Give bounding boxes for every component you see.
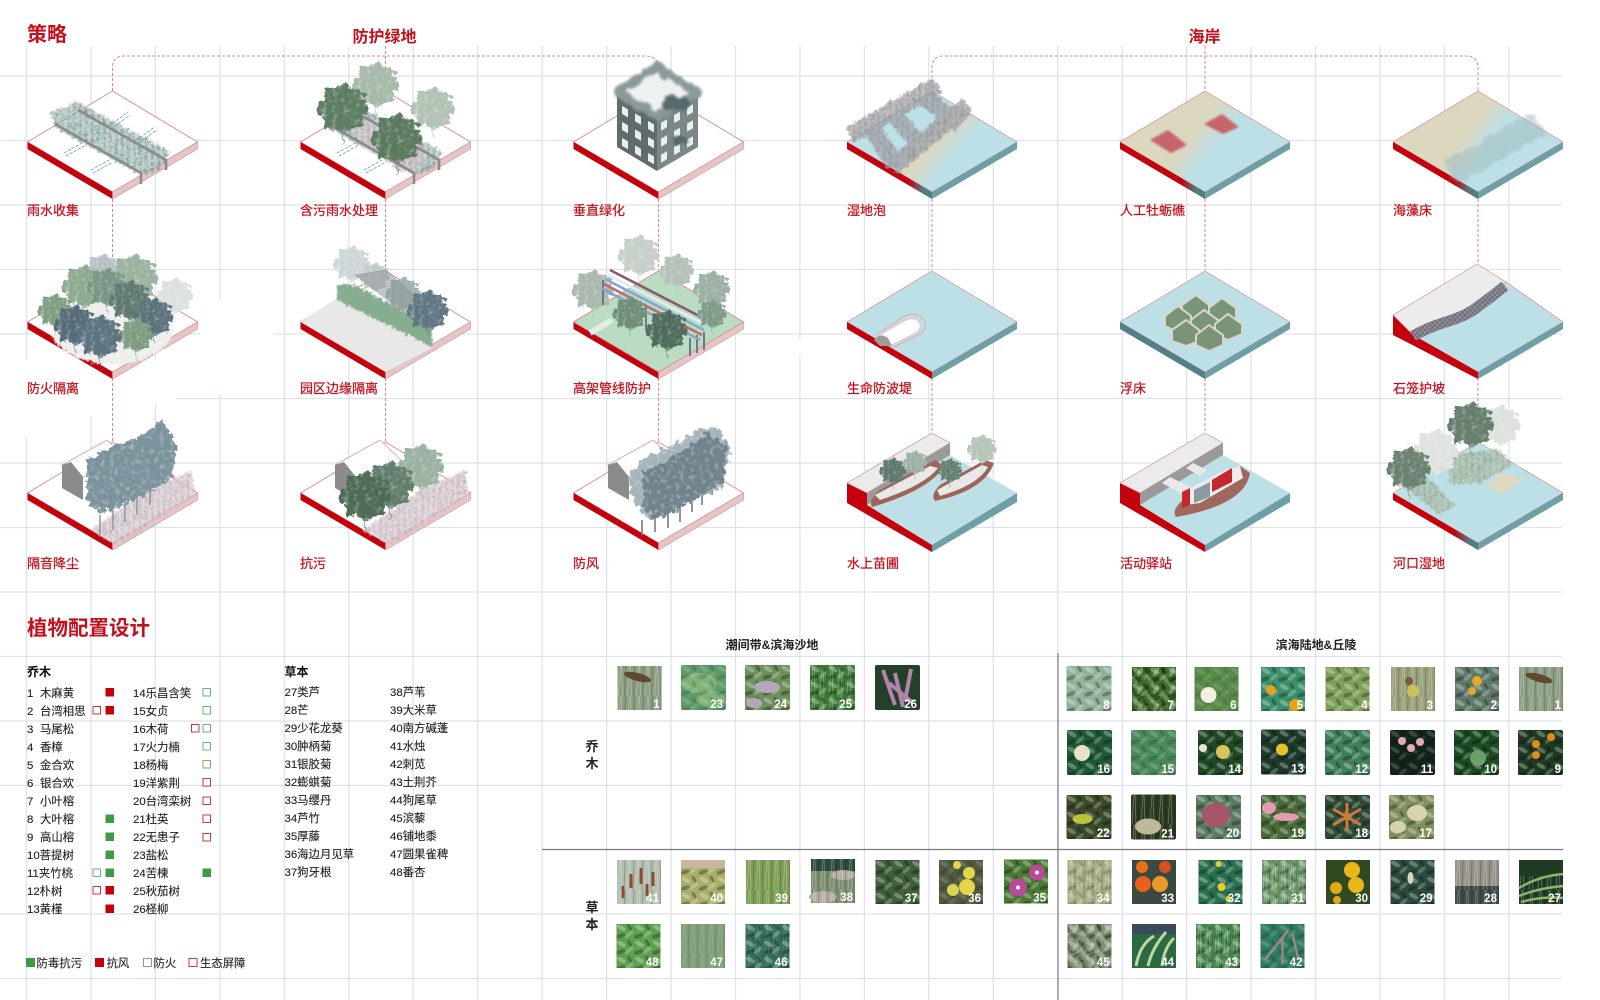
photo 31 [1262,860,1306,905]
legend: 乔木 list: 香樟 [40,740,63,754]
legend: 乔木 list: 24苦楝 [133,866,169,880]
panel: 抗污 [300,440,470,571]
photo 23 [681,665,726,711]
photo 16: 16 [1097,764,1110,776]
legend: 乔木 list: 高山榕 [40,830,75,844]
legend: 乔木 list [27,664,191,916]
photo 32: 32 [1228,893,1240,905]
panel: 石笼护坡: 石笼护坡 [1393,381,1445,396]
photo 9: 9 [1555,764,1561,776]
legend: 草本 list: 45滨藜 [390,811,425,825]
panel: 防火隔离 [27,254,198,396]
photo 19: 19 [1291,828,1304,840]
estuary trees [1387,402,1520,500]
photo 8: 8 [1103,700,1110,712]
photo 43 [1196,924,1240,969]
photo 9 [1518,730,1563,776]
legend: 乔木 list: 1 [27,688,33,700]
legend: 草本 list: 30肿柄菊 [284,739,331,753]
photo 6 [1194,667,1238,712]
legend: 草本 list: 29少花龙葵 [284,722,343,735]
legend: 乔木 list: 2 [27,706,33,718]
photo 25: 25 [839,699,853,711]
photo 12 [1325,730,1370,776]
photo 17: 17 [1419,828,1432,840]
photo 20: 20 [1226,828,1239,840]
photo 14 [1198,730,1243,776]
row label: 草本: 草 [585,900,599,915]
photo 30 [1326,860,1370,905]
photo 19 [1261,795,1306,840]
trees behind [573,235,730,320]
title: 植物配置设计: 植物配置设计 [27,616,150,640]
photo 39: 39 [775,893,788,905]
photo 44: 44 [1161,957,1175,969]
gabion wall [1413,286,1505,336]
legend: 乔木 list: 16木荷 [133,723,168,736]
legend: functions: 防火 [154,956,176,970]
tree group [318,62,455,175]
photo 1 right [1519,667,1563,712]
photo 5: 5 [1297,700,1304,712]
legend: 乔木 list: 8 [27,814,33,826]
legend: 乔木 list: 26柽柳 [133,902,168,916]
panel: 生命防波堤: 生命防波堤 [847,381,912,396]
photo 1 right: 1 [1555,700,1562,712]
photo 38 [809,859,855,904]
photo 21: 21 [1161,828,1175,840]
heading: 滨海陆地&丘陵: 滨海陆地&丘陵 [1276,637,1356,652]
photo 26 [875,665,920,711]
legend: 草本 list: 28芒 [284,704,309,717]
photo 33: 33 [1161,893,1174,905]
legend: 乔木 list: 15女贞 [133,704,168,718]
trees in front [613,297,726,360]
legend: 草本 list: 46铺地黍 [390,830,437,843]
row label: 乔木 [585,739,599,771]
photo 1: 1 [653,699,660,711]
photo 41 [617,860,661,905]
legend: 乔木 list: 19洋紫荆 [133,776,180,790]
legend: 乔木 list: 14乐昌含笑 [133,686,191,700]
photo 45 [1068,924,1112,969]
photo 8 [1066,666,1112,712]
legend: 乔木 list: 9 [27,832,33,844]
photo 47: 47 [710,957,723,969]
panel: 隔音降尘: 隔音降尘 [27,556,79,571]
panel: 活动驿站: 活动驿站 [1120,556,1172,571]
photo 28 [1455,860,1499,905]
legend: 草本 list: 37狗牙根 [284,865,331,879]
legend: 草本 list: 44狗尾草 [390,794,437,807]
legend: 乔木 list: 5 [27,760,33,772]
legend: functions [26,956,246,970]
photo 40 [681,860,725,905]
legend: 草本 list: 41水烛 [390,740,426,753]
heading: 潮间带&滨海沙地: 潮间带&滨海沙地 [726,637,818,652]
photo 29: 29 [1420,893,1432,905]
photo 15: 15 [1161,764,1175,776]
photo 37: 37 [905,893,918,905]
legend: 乔木 list: 小叶榕 [40,794,75,808]
photo 10 [1454,730,1499,776]
legend: 草本 list: 40南方碱蓬 [390,721,448,735]
panel: 园区边缘隔离: 园区边缘隔离 [300,381,378,396]
photo 37 [876,860,920,905]
photo 36: 36 [968,893,981,905]
photo 7 [1132,667,1176,712]
photo 20 [1196,795,1241,840]
photo 16 [1067,730,1112,776]
trees [340,444,444,533]
boats [871,435,996,507]
photo 11 [1390,730,1435,776]
panel: 浮床 [1120,271,1290,396]
photo 41: 41 [646,893,660,905]
panel: 高架管线防护: 高架管线防护 [573,381,651,396]
legend: functions: 生态屏障 [200,956,246,970]
row label: 草本 [585,900,599,932]
panel: 浮床: 浮床 [1120,381,1146,396]
panel: 水上苗圃: 水上苗圃 [847,556,899,571]
row label: 草本: 本 [585,917,599,932]
legend: 乔木 list: 11夹竹桃 [27,866,74,880]
boundary trees and fence [334,246,448,340]
legend: functions: 抗风 [106,956,130,970]
photo 36 [939,860,983,905]
photo 25 [810,665,855,711]
photo 27 [1519,860,1563,905]
photo 5 [1261,667,1305,712]
legend: 草本 list: 48番杏 [390,866,425,879]
photo 15 [1131,730,1176,776]
panel: 防风 [573,428,744,571]
panel: 园区边缘隔离 [300,246,470,396]
photo 10: 10 [1484,764,1497,776]
photo 2: 2 [1491,700,1497,712]
hexagonal floats [1165,295,1242,351]
photo 40: 40 [710,893,723,905]
photo 12: 12 [1355,764,1368,776]
legend: 乔木 list: 4 [27,742,33,754]
legend: 乔木 list: 7 [27,796,33,808]
photo 3 [1391,667,1435,712]
legend: 草本 list: 34芦竹 [284,811,320,825]
legend: 乔木 list: 22无患子 [133,831,180,844]
heading: 海岸: 海岸 [1188,28,1221,46]
photo 4: 4 [1361,700,1368,712]
photo 22: 22 [1097,828,1110,840]
legend: 草本 list: 47圆果雀稗 [390,847,448,861]
legend: 乔木 list: 20台湾栾树 [133,794,191,808]
photo 24: 24 [774,699,788,711]
photo 23: 23 [710,699,723,711]
photo 22 [1066,795,1112,840]
photo 32 [1198,860,1242,905]
photo 24 [745,665,790,711]
legend markers [93,688,211,913]
panel: 雨水收集 [27,91,198,218]
photo 33 [1132,860,1176,905]
photo 46 [746,924,790,969]
photo 30: 30 [1355,893,1368,905]
legend: 草本 list: 38芦苇 [390,685,425,699]
photo 42: 42 [1290,957,1302,969]
legend: 乔木 list: 金合欢 [40,758,75,772]
legend: 草本 list: 36海边月见草 [284,847,354,861]
legend: 乔木 list: 银合欢 [40,776,75,790]
panel: 垂直绿化 [573,67,744,218]
photo 2 [1455,667,1499,712]
legend: 草本 list: 42刺苋 [390,758,425,771]
photo 27: 27 [1548,893,1561,905]
photo 35: 35 [1033,892,1047,904]
legend: 乔木 list: 13黄槿 [27,902,62,916]
panel: 水上苗圃 [847,433,1017,571]
row label: 乔木: 乔 [585,739,599,754]
panel: 垂直绿化: 垂直绿化 [573,203,625,218]
photo 26: 26 [904,699,917,711]
photo 1 [618,666,662,711]
photo 11: 11 [1421,764,1434,776]
panel: 隔音降尘 [27,420,198,571]
panel: 雨水收集: 雨水收集 [27,203,79,218]
legend: 草本 list: 31银胶菊 [284,757,331,771]
legend: 乔木 list: 18杨梅 [133,758,168,772]
dense tree mass [87,420,176,535]
building [617,67,698,171]
legend: 草本 list: 35厚藤 [284,830,321,843]
panel: 人工牡蛎礁: 人工牡蛎礁 [1120,203,1185,218]
legend: 乔木 list: 3 [27,724,33,736]
panel: 高架管线防护 [573,235,744,396]
panel: 含污雨水处理 [300,62,470,218]
photo 4 [1326,667,1370,712]
legend: 乔木 list: 17火力楠 [133,740,180,754]
panel: 海藻床 [1393,91,1563,218]
photo 43: 43 [1225,957,1238,969]
panel: 湿地泡: 湿地泡 [847,203,886,218]
panel: 人工牡蛎礁 [1120,91,1290,218]
legend: 乔木 list: 台湾相思 [40,704,86,718]
panel: 海藻床: 海藻床 [1393,203,1432,218]
photo 29 [1390,860,1434,905]
legend: functions: 防毒抗污 [36,956,82,970]
panel: 湿地泡 [847,85,1017,218]
legend: 乔木 list: 马尾松 [40,722,74,736]
title: 策略: 策略 [27,22,67,46]
legend: 乔木 list: 10菩提树 [27,848,74,862]
legend: 乔木 list: 25秋茄树 [133,884,180,898]
elevated pipes [602,270,707,356]
photo 44 [1132,924,1176,969]
photo 48: 48 [646,957,659,969]
photo 34: 34 [1097,893,1110,905]
forest trees [38,254,193,368]
photo 48 [616,924,660,969]
panel: 河口湿地: 河口湿地 [1393,556,1445,571]
photo 6: 6 [1230,700,1236,712]
photo 28: 28 [1484,893,1498,905]
photo 18 [1325,795,1370,840]
windbreak trees [628,428,730,535]
photo 14: 14 [1228,764,1242,776]
photo 35 [1004,860,1048,904]
photo 3: 3 [1427,700,1433,712]
legend: 乔木 list: 乔木 [27,664,51,679]
legend: 乔木 list: 木麻黄 [40,686,74,700]
photo 38: 38 [840,892,854,904]
legend: 草本 list: 33马缨丹 [284,794,331,807]
photo 21 [1131,794,1176,840]
legend: 草本 list: 43土荆芥 [390,776,437,789]
photo 18: 18 [1355,828,1369,840]
legend: 乔木 list: 23盐松 [133,848,168,862]
legend: 乔木 list: 6 [27,778,33,790]
photo 17 [1389,795,1434,840]
photo 46: 46 [775,957,788,969]
panel: 生命防波堤 [847,271,1017,396]
panel: 抗污: 抗污 [300,556,326,571]
breakwater [874,314,926,348]
boat station [1162,463,1250,517]
photo 39 [746,860,790,905]
panel: 河口湿地 [1387,402,1563,571]
photo 13: 13 [1291,764,1304,776]
panel: 防风: 防风 [573,556,599,571]
photo 42 [1260,924,1304,969]
panel: 石笼护坡 [1393,264,1563,396]
legend: 草本 list: 39大米草 [390,703,437,717]
heading: 防护绿地: 防护绿地 [352,27,417,46]
row label: 乔木: 木 [585,756,599,771]
photo 47 [681,924,725,969]
photo 13 [1261,730,1306,776]
legend: 乔木 list: 21杜英 [133,812,169,826]
legend: 草本 list: 27类芦 [284,685,320,699]
panel: 防火隔离: 防火隔离 [27,381,79,396]
panel: 含污雨水处理: 含污雨水处理 [300,203,378,218]
legend: 乔木 list: 大叶榕 [40,812,75,826]
panel: 活动驿站 [1120,433,1290,571]
legend: 草本 list [284,664,448,879]
photo 31: 31 [1291,893,1305,905]
photo 7: 7 [1168,700,1174,712]
legend: 草本 list: 32蟛蜞菊 [284,776,331,789]
photo 34 [1068,860,1112,905]
legend: 草本 list: 草本 [284,664,309,679]
legend: 乔木 list: 12朴树 [27,884,62,898]
photo 45: 45 [1097,957,1110,969]
